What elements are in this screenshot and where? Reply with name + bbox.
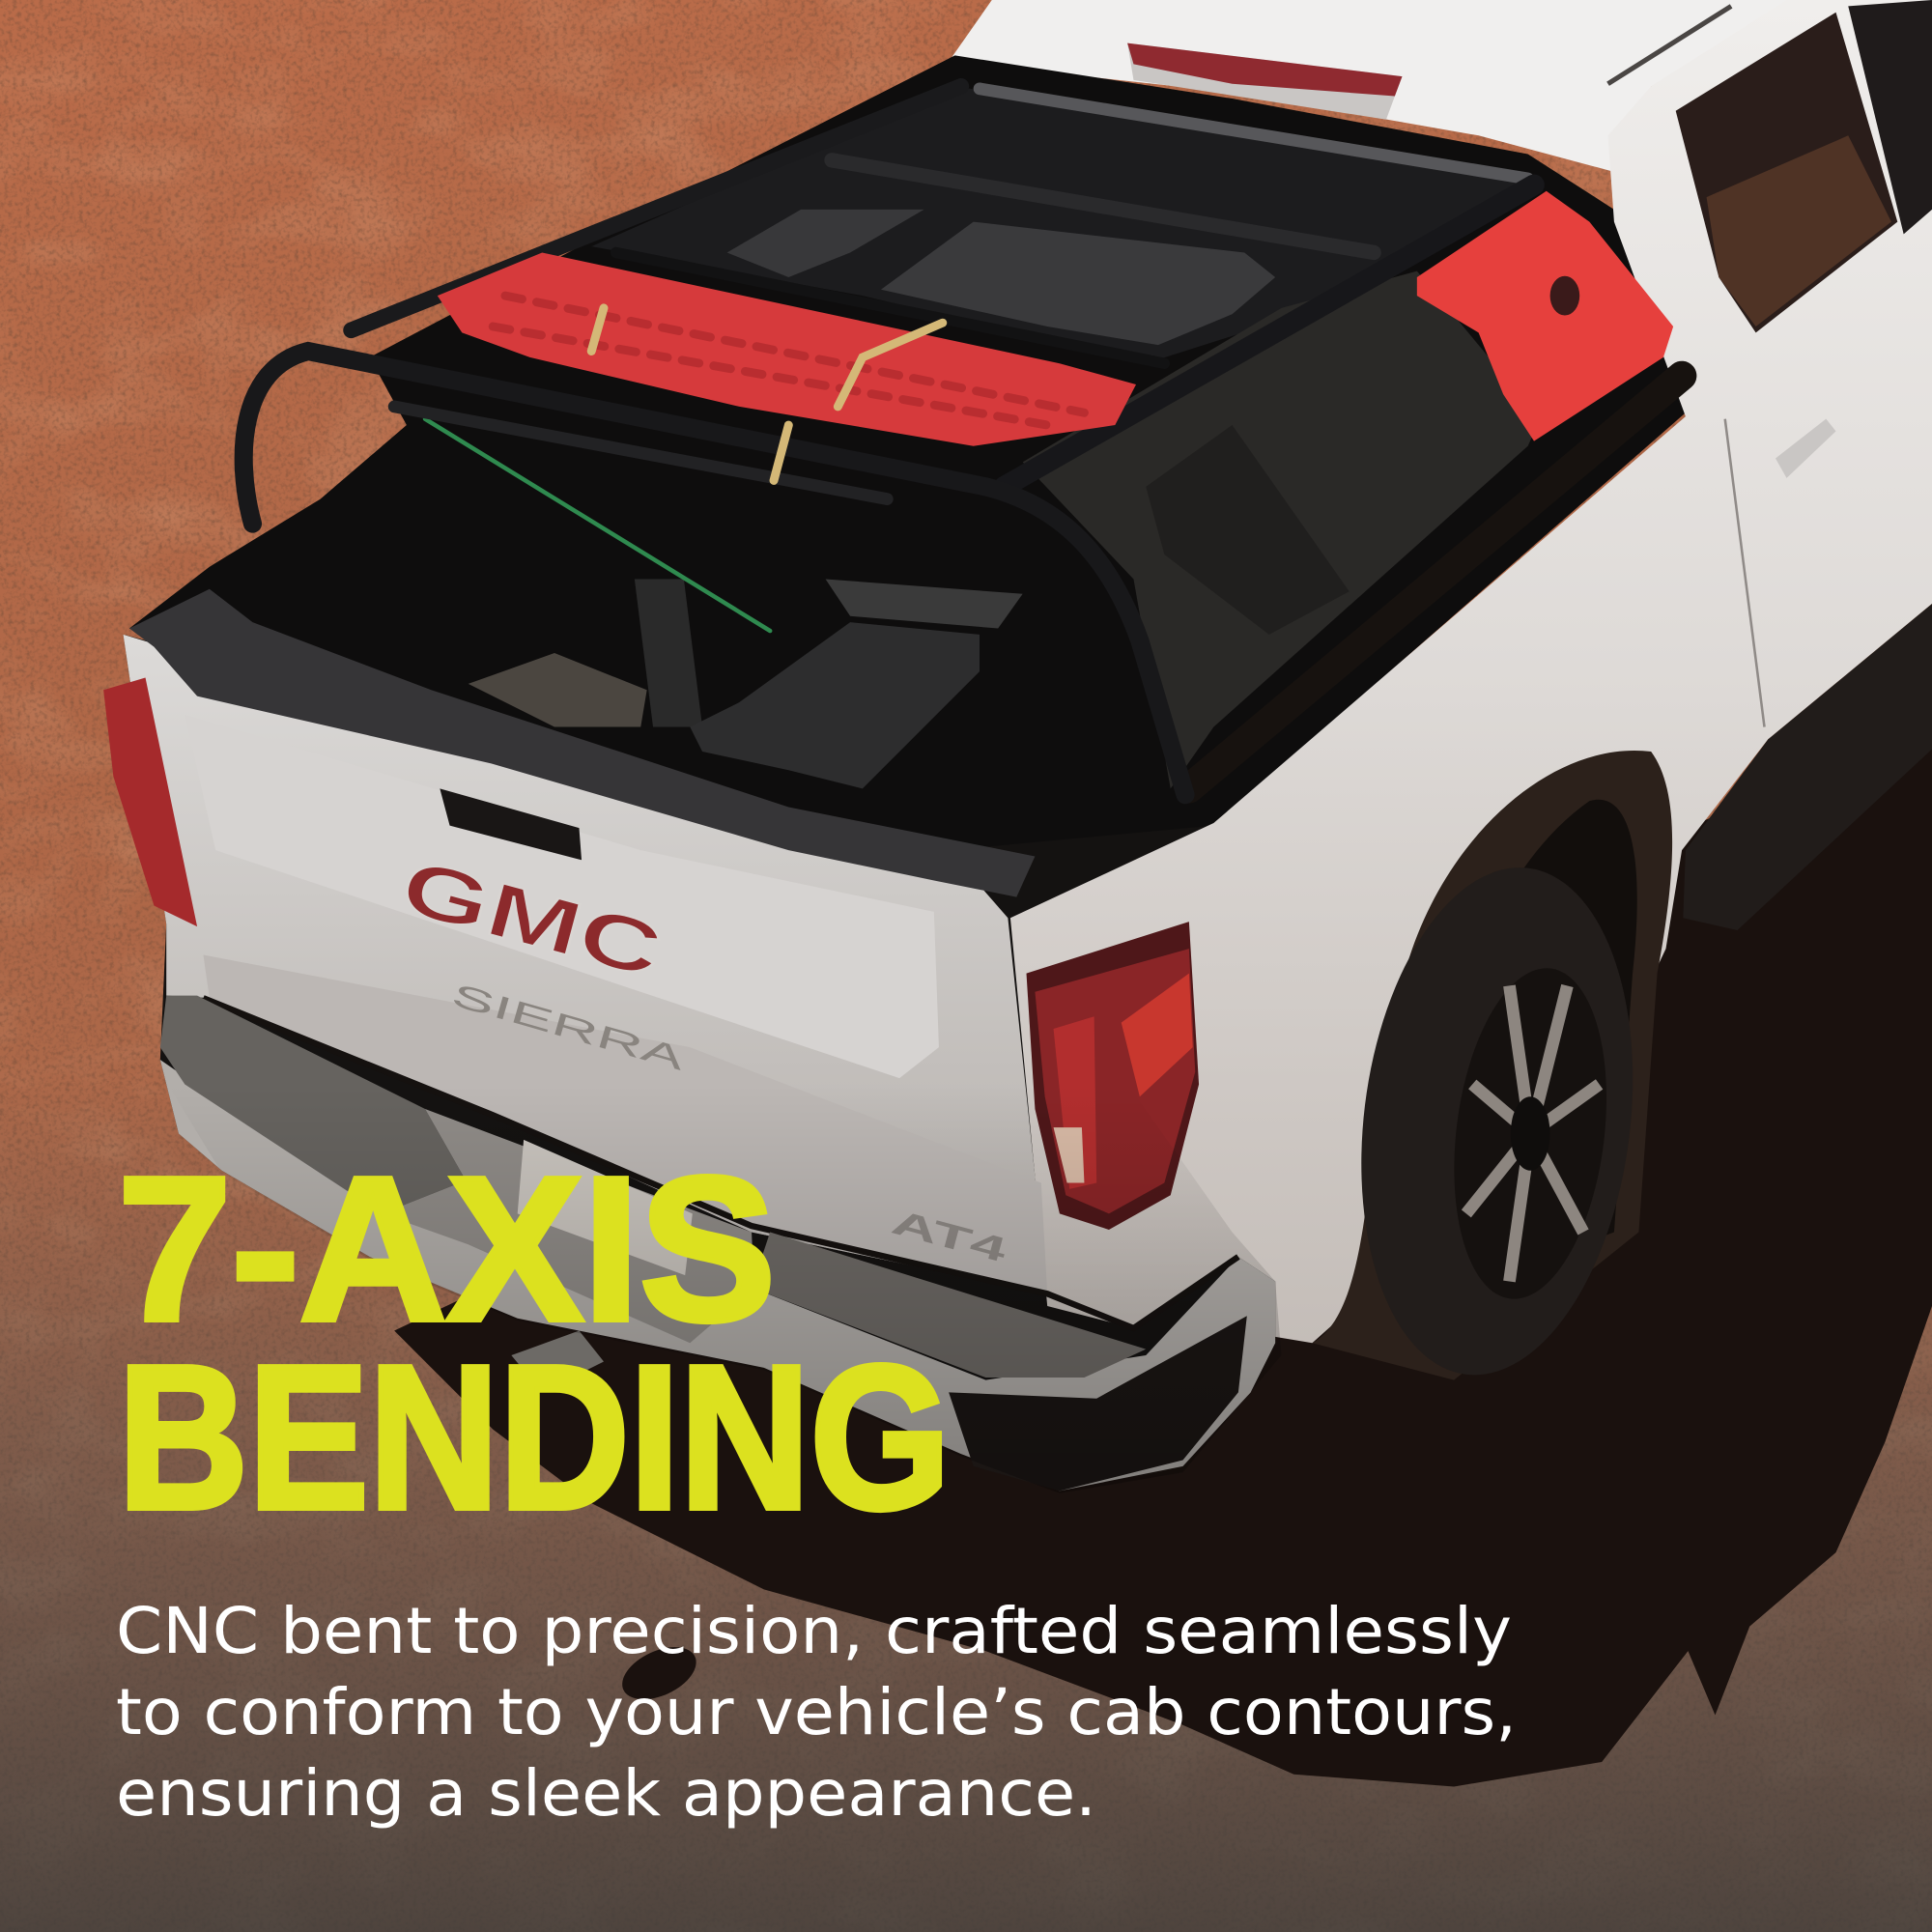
bed rack xyxy=(243,86,1682,795)
truck shadow on the ground xyxy=(394,727,1932,1786)
rear deck bar xyxy=(980,89,1528,179)
rear bumper xyxy=(160,1060,1275,1491)
heading line 2: BENDING xyxy=(118,1322,951,1551)
description text xyxy=(116,1594,1517,1831)
tailgate black cap xyxy=(129,589,1035,897)
right tail light lens xyxy=(1035,949,1195,1213)
rear hoop xyxy=(243,352,1185,795)
bumper centre recess xyxy=(382,1109,754,1343)
bed floor cargo xyxy=(469,653,647,727)
tailgate handle xyxy=(440,788,582,860)
heading line 1: 7-AXIS xyxy=(118,1134,776,1363)
description line 2: to conform to your vehicle’s cab contours, xyxy=(116,1675,1517,1749)
rear cab window xyxy=(1676,13,1897,332)
heading xyxy=(118,1134,951,1551)
upper right rail xyxy=(1005,185,1534,487)
red traction board xyxy=(438,252,1136,446)
cab and bed side panel xyxy=(1010,0,1932,1343)
hitch xyxy=(511,1331,604,1392)
strap buckles xyxy=(591,308,943,480)
AT4 badge: AT4 xyxy=(888,1203,1010,1270)
truck xyxy=(103,0,1932,1497)
wheel rim xyxy=(1436,959,1624,1308)
running board xyxy=(1683,604,1932,930)
green strap xyxy=(425,419,770,631)
bumper right step pad xyxy=(752,1233,1146,1378)
lower truck shading xyxy=(211,1143,1280,1492)
tailgate xyxy=(124,635,1047,1293)
cross rail xyxy=(616,252,1164,363)
tailgate upper panel xyxy=(185,715,939,1078)
lower hoop rail xyxy=(394,407,887,499)
roof of the cab xyxy=(949,0,1932,173)
door handle xyxy=(1776,419,1836,478)
description line 1: CNC bent to precision, crafted seamlessly xyxy=(116,1594,1512,1668)
truck lower silhouette filler xyxy=(124,635,1275,1491)
rear tyre xyxy=(1334,852,1661,1391)
lower side rail xyxy=(1189,376,1682,788)
left rack rail xyxy=(352,86,961,330)
description line 3: ensuring a sleek appearance. xyxy=(116,1756,1096,1831)
right tail light xyxy=(1026,922,1199,1230)
left deck case xyxy=(727,210,924,277)
third brake light xyxy=(1127,43,1403,120)
deck cross bars xyxy=(832,160,1374,252)
inner wheel well xyxy=(1417,800,1637,1306)
bumper seam xyxy=(203,998,1238,1328)
wheel arch xyxy=(1312,751,1672,1380)
accessory bracket xyxy=(1146,425,1350,635)
bumper lower black trim xyxy=(949,1316,1247,1491)
storage case xyxy=(690,622,980,788)
case top grid xyxy=(826,579,1023,629)
red fuel can xyxy=(1417,191,1673,441)
left tail light xyxy=(103,678,197,926)
deck cases xyxy=(881,222,1275,345)
bumper left step pad xyxy=(160,996,466,1213)
GMC badge: GMC xyxy=(392,842,670,994)
bed interior xyxy=(129,55,1686,899)
front cab window xyxy=(1848,0,1932,234)
roof rail xyxy=(1608,6,1731,84)
right side mounting plate xyxy=(1023,271,1540,788)
license plate xyxy=(518,1140,693,1275)
window reflection xyxy=(1707,135,1891,327)
rack deck xyxy=(591,86,1534,363)
rack support post xyxy=(635,579,702,727)
Sierra badge: SIERRA xyxy=(447,978,690,1078)
tailgate lower crease xyxy=(203,955,1047,1293)
door seam xyxy=(1725,419,1765,727)
